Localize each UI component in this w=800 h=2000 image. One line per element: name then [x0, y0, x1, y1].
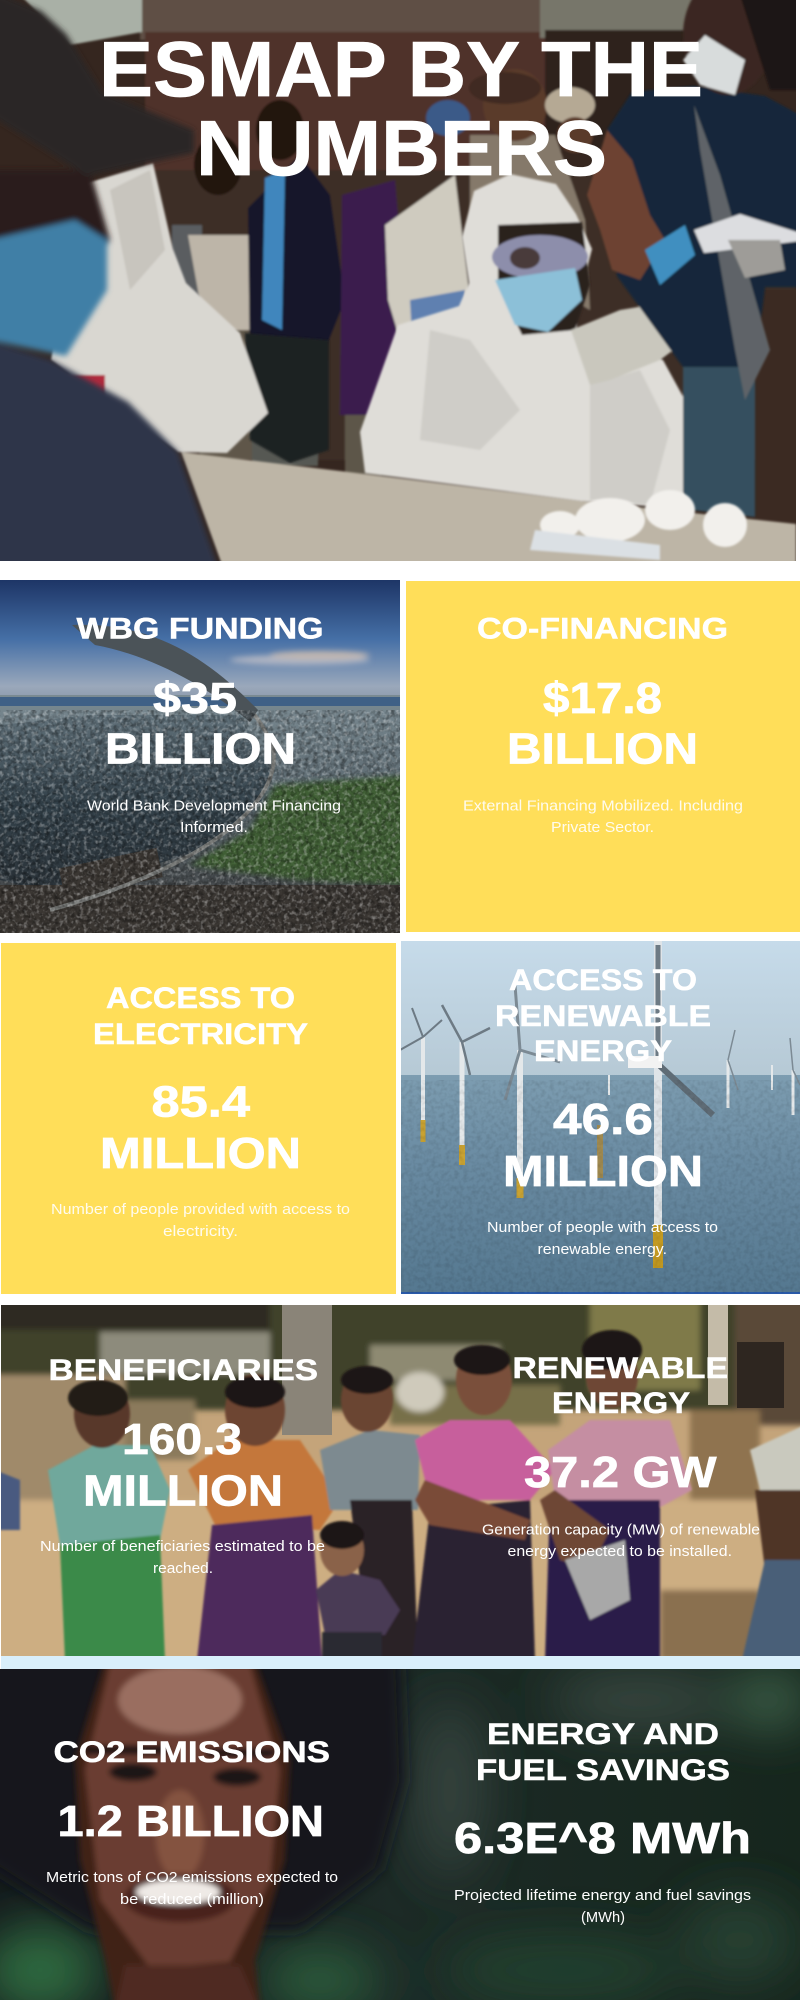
description: World Bank Development Financing	[87, 798, 341, 814]
description: Number of people with access to	[487, 1219, 718, 1236]
background	[1, 943, 396, 1294]
description: CO2 emissions: be reduced (million)	[120, 1891, 264, 1908]
panel: co-financing	[406, 581, 800, 932]
description: energy and fuel savings	[454, 1887, 751, 1926]
heading: CO2 emissions: CO2 EMISSIONS	[54, 1736, 330, 1769]
heading: WBG FUNDING	[76, 612, 324, 646]
figure: CO2 emissions: 1.2 BILLION	[58, 1797, 324, 1846]
description: energy and fuel savings: Projected lifetime energy and fuel savings	[454, 1887, 751, 1904]
figure: renewable energy: 37.2 GW	[524, 1448, 717, 1497]
figure	[105, 674, 296, 774]
photo: spiralling city	[0, 580, 410, 933]
description	[463, 798, 743, 836]
title: ESMAP BY THE	[99, 25, 703, 113]
figure: beneficiaries	[83, 1415, 283, 1516]
heading: renewable energy: ENERGY	[552, 1387, 690, 1420]
heading: energy and fuel savings: FUEL SAVINGS	[476, 1754, 730, 1787]
heading	[93, 982, 308, 1051]
description: Informed.	[180, 819, 248, 836]
figure	[100, 1078, 301, 1178]
title	[99, 25, 703, 192]
heading: RENEWABLE	[495, 1000, 711, 1033]
heading: ELECTRICITY	[93, 1018, 308, 1051]
photo: smiling woman	[0, 1650, 800, 2000]
figure: energy and fuel savings: 6.3E^8 MWh	[454, 1814, 751, 1863]
description: Private Sector.	[551, 819, 654, 836]
figure: beneficiaries: 160.3	[122, 1415, 242, 1464]
heading: ACCESS TO	[106, 982, 295, 1015]
description: beneficiaries: Number of beneficiaries estimated to be	[40, 1538, 325, 1555]
description: CO2 emissions	[46, 1869, 338, 1908]
panel: beneficiaries and renewable energy	[0, 1295, 800, 1666]
heading	[495, 964, 711, 1068]
description: energy and fuel savings: (MWh)	[581, 1909, 625, 1926]
description: electricity.	[163, 1223, 238, 1240]
heading: energy and fuel savings: ENERGY AND	[487, 1718, 719, 1751]
panel: WBG funding	[0, 580, 410, 933]
panel: hero photo with title	[0, 0, 800, 570]
description: beneficiaries	[40, 1538, 325, 1577]
heading: ENERGY	[534, 1035, 672, 1068]
figure: BILLION	[507, 724, 698, 774]
description	[87, 798, 341, 836]
panel: access to electricity	[1, 943, 396, 1294]
figure: MILLION	[100, 1129, 301, 1178]
figure: $17.8	[543, 674, 662, 723]
heading: CO-FINANCING	[477, 612, 728, 646]
heading: beneficiaries: BENEFICIARIES	[48, 1354, 318, 1387]
photo: health workers in protective suits	[0, 0, 800, 570]
divider strip	[1, 1656, 800, 1669]
photo: offshore wind farm	[400, 941, 800, 1294]
description: renewable energy: Generation capacity (MW) of renewable	[482, 1522, 760, 1538]
figure: BILLION	[105, 724, 296, 774]
figure: 46.6	[553, 1095, 653, 1144]
figure: 85.4	[152, 1078, 251, 1126]
panel: CO2 emissions and energy savings	[0, 1650, 800, 2000]
figure	[503, 1095, 703, 1196]
heading: renewable energy: RENEWABLE	[512, 1352, 728, 1385]
heading: energy and fuel savings	[476, 1718, 730, 1787]
figure: MILLION	[503, 1147, 703, 1196]
description: beneficiaries: reached.	[153, 1560, 213, 1577]
description: CO2 emissions: Metric tons of CO2 emissions expected to	[46, 1869, 338, 1886]
description: External Financing Mobilized. Including	[463, 798, 743, 814]
panel: access to renewable energy	[400, 941, 800, 1294]
description: renewable energy	[482, 1522, 760, 1560]
background	[406, 581, 800, 932]
description	[487, 1219, 718, 1258]
description: Number of people provided with access to	[51, 1201, 350, 1218]
figure: $35	[153, 674, 237, 723]
figure: beneficiaries: MILLION	[83, 1466, 283, 1516]
heading: ACCESS TO	[509, 964, 697, 997]
title: NUMBERS	[196, 104, 607, 192]
description: renewable energy.	[538, 1241, 667, 1258]
description: renewable energy: energy expected to be installed.	[508, 1543, 732, 1560]
description	[51, 1201, 350, 1240]
heading: renewable energy	[512, 1352, 728, 1420]
figure	[507, 674, 698, 774]
photo: group of women	[0, 1295, 800, 1666]
